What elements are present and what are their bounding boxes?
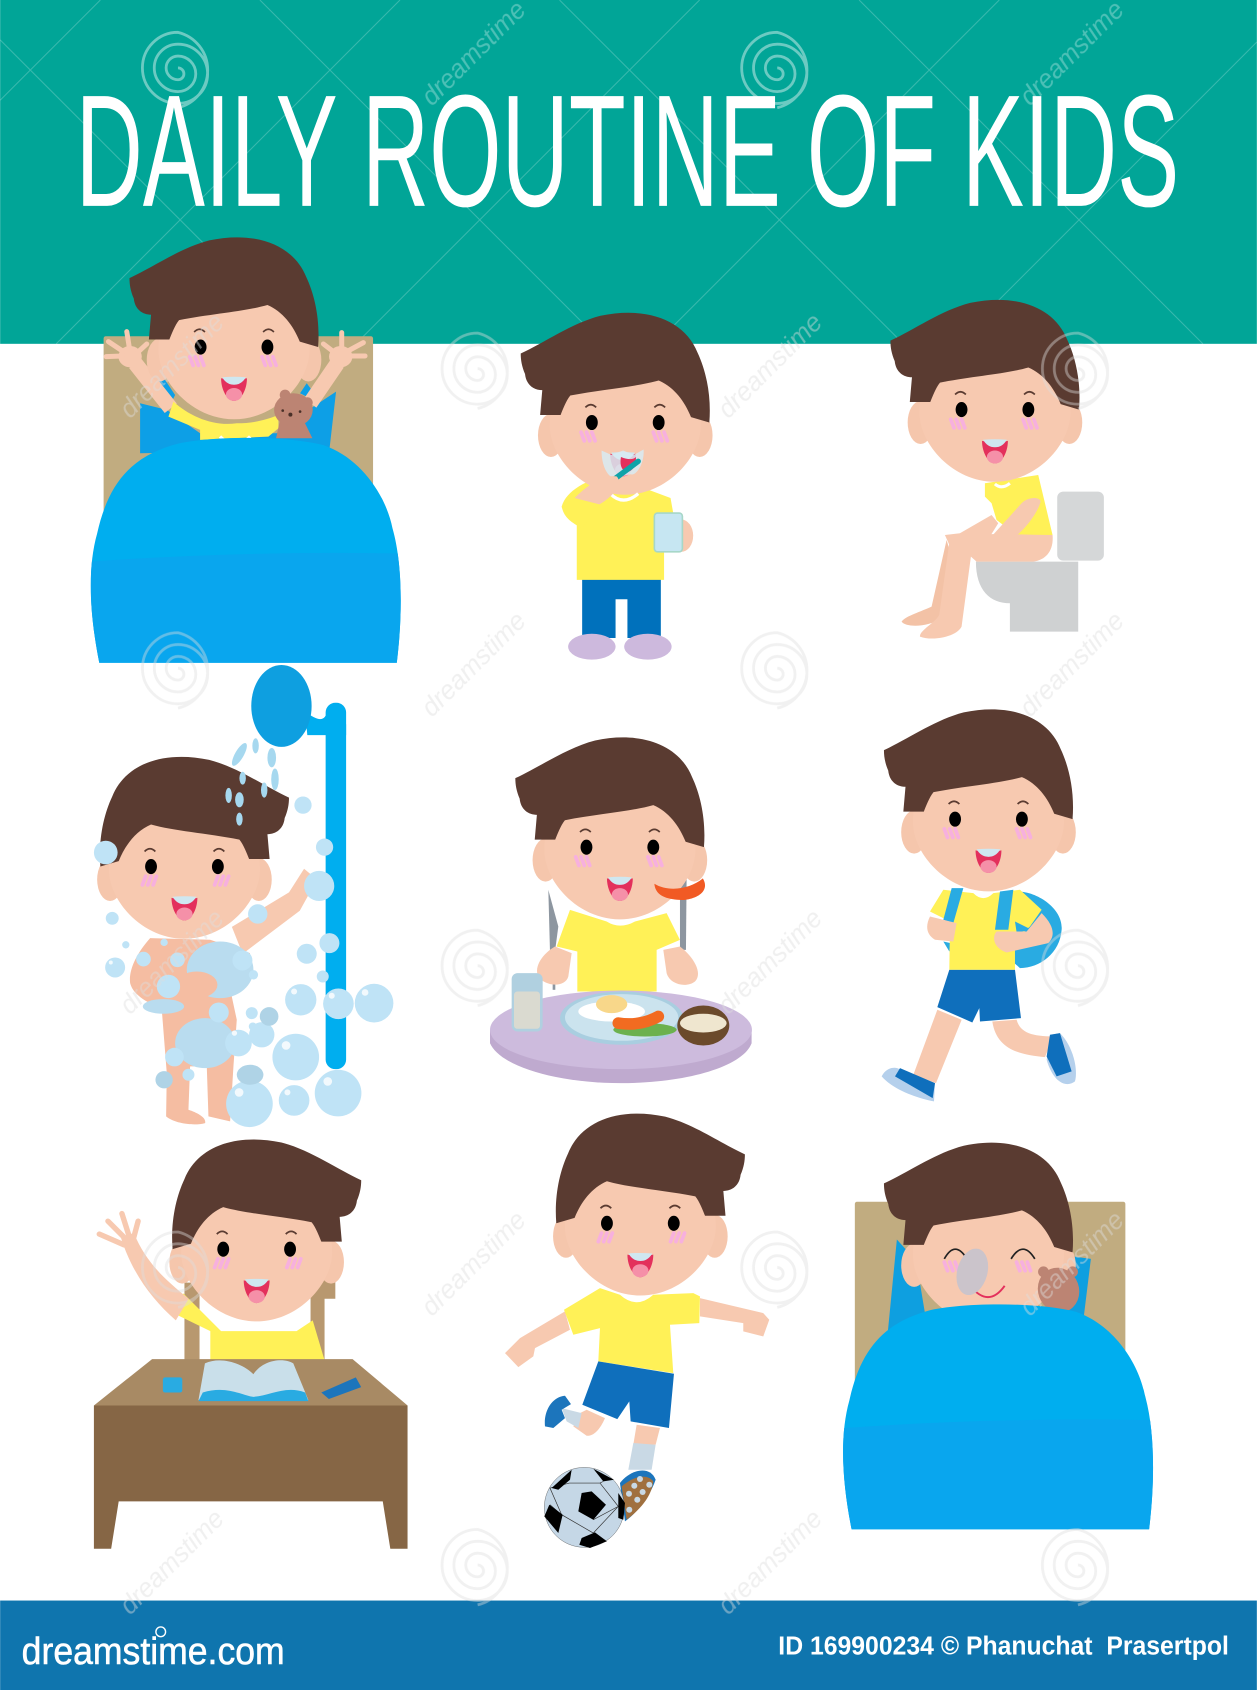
hand (575, 476, 619, 504)
watermark (115, 0, 1130, 1620)
shirt (930, 890, 1042, 970)
header band (0, 0, 1257, 344)
scene: taking a shower (94, 665, 393, 1127)
shoes (882, 1033, 1076, 1101)
image credit: ID 169900234 © Phanuchat Prasertpol (778, 1632, 1229, 1660)
body and foam (105, 933, 393, 1127)
watermark: dreamstime (115, 905, 230, 1020)
book (198, 1360, 308, 1400)
watermark: dreamstime (1015, 1206, 1130, 1322)
pillow (886, 1239, 1091, 1349)
straps (943, 888, 1032, 932)
scene: studying at a desk (94, 1139, 408, 1549)
front shoe (620, 1471, 656, 1521)
smile (970, 1286, 1005, 1297)
closed eyes (944, 1249, 1035, 1259)
desk (94, 1359, 408, 1405)
arm (232, 869, 317, 954)
scene: on the toilet (890, 300, 1104, 639)
scene: walking to school (882, 888, 1076, 1101)
watermark: dreamstime (1015, 607, 1130, 722)
watermark blot on nose (952, 1245, 993, 1299)
toilet and legs (902, 475, 1104, 639)
watermark: dreamstime (115, 309, 230, 424)
arms (505, 1298, 769, 1367)
chair (184, 1266, 335, 1360)
shower head and pole (251, 665, 346, 1069)
scene: playing football (505, 1114, 769, 1548)
blanket (76, 431, 420, 668)
backpack (943, 891, 1062, 968)
watermark: dreamstime (713, 309, 828, 424)
footer band (0, 1601, 1257, 1690)
front leg (633, 1425, 660, 1445)
scene: sleeping in bed (828, 1143, 1173, 1535)
watermark: dreamstime (713, 905, 828, 1020)
trousers (582, 579, 661, 638)
footer logo: dreamstime.com (22, 1630, 285, 1672)
waving arm (121, 1233, 189, 1320)
teddy bear (1032, 1262, 1086, 1318)
watermark: dreamstime (416, 607, 532, 722)
shirt (564, 1288, 700, 1373)
watermark: dreamstime (115, 1505, 230, 1620)
watermark: dreamstime (416, 1206, 532, 1322)
scene: eating breakfast (490, 737, 752, 1083)
water drops (225, 738, 279, 826)
arms (927, 913, 1053, 952)
back leg and shoe (545, 1396, 605, 1436)
watermark: dreamstime (713, 1505, 828, 1620)
collar (610, 494, 638, 500)
scene: brushing teeth (521, 313, 713, 660)
blanket (828, 1298, 1173, 1535)
legs (913, 1010, 1053, 1083)
scene: waking up in bed (76, 237, 420, 668)
upper bubbles (94, 796, 334, 925)
shorts (582, 1361, 674, 1428)
headboard (855, 1202, 1125, 1407)
body, knife and fork (537, 877, 698, 991)
eraser and pencil (163, 1377, 182, 1393)
walking boy head (884, 709, 1076, 891)
shorts (937, 970, 1021, 1022)
collar (220, 437, 250, 445)
shirt (577, 487, 676, 580)
table and food (490, 973, 752, 1083)
glass (654, 513, 693, 552)
shirt (173, 1293, 325, 1360)
pillow and arms (106, 332, 365, 453)
slippers (568, 634, 672, 660)
foam and toothbrush (602, 449, 644, 481)
teddy bear (274, 390, 313, 438)
sausage (654, 878, 705, 900)
football (544, 1467, 625, 1548)
